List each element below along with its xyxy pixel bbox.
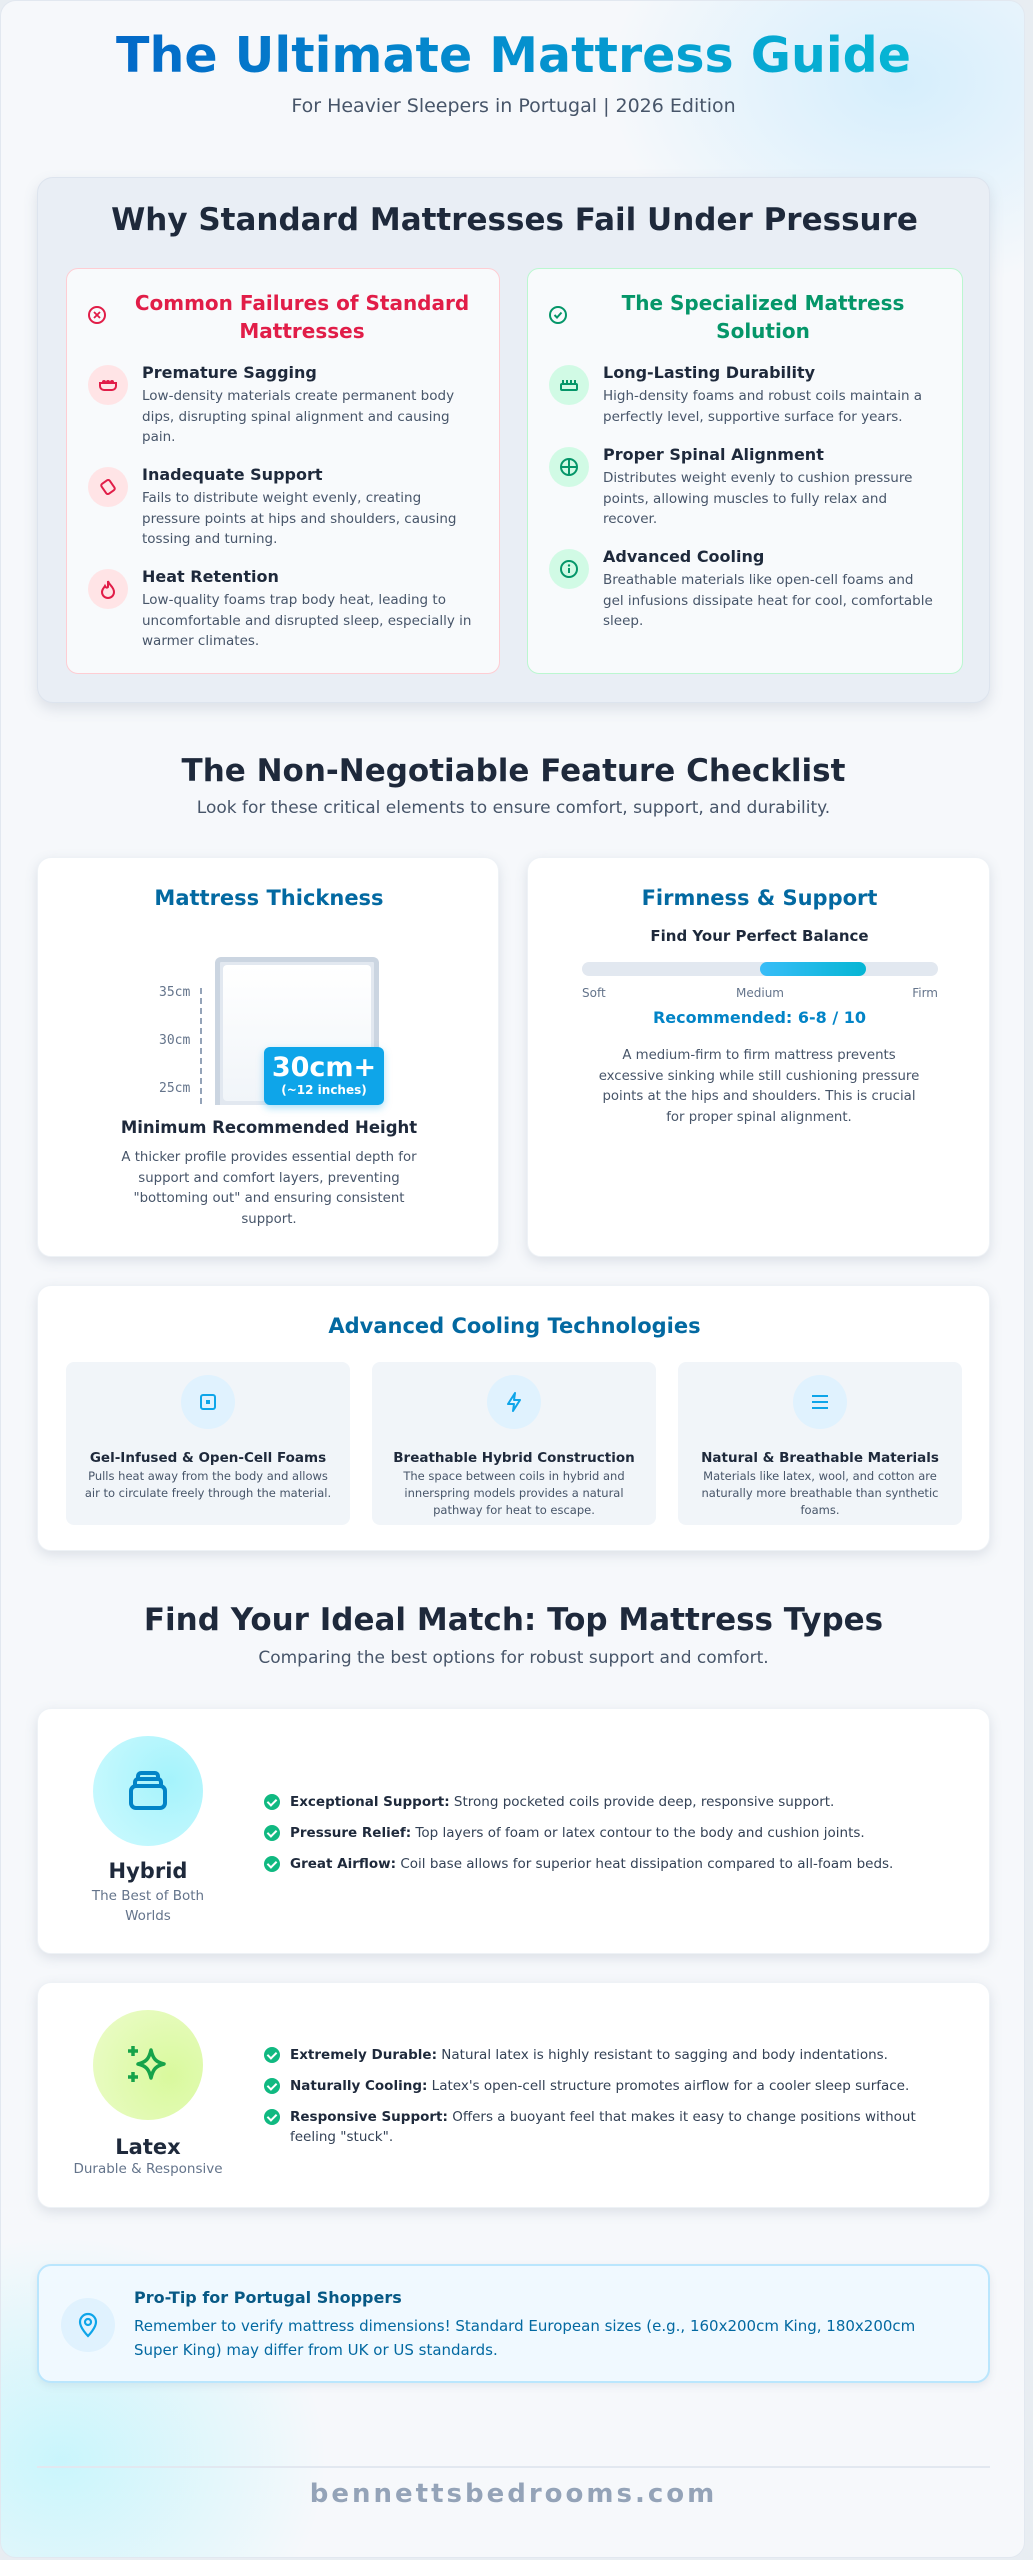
list: latex benefits: Responsive Support: Offers a buoyant feel that makes it easy to change positions without feeling "stuck". <box>290 2109 916 2145</box>
card: hybrid construction <box>372 1362 656 1525</box>
panel: common failures: Low-quality foams trap body heat, leading to uncomfortable and disrupted sleep, especially in warmer climates. <box>142 592 471 649</box>
panel: latex <box>37 1982 990 2208</box>
icon: gel <box>181 1375 235 1429</box>
title: The Ultimate Mattress Guide <box>116 27 911 84</box>
card: hybrid construction: Breathable Hybrid Construction <box>393 1450 635 1466</box>
label: hybrid sub: The Best of Both Worlds <box>92 1888 204 1924</box>
text: balance: Find Your Perfect Balance <box>650 927 869 945</box>
badge: 30cm+: (~12 inches) <box>281 1083 367 1097</box>
chart: firmness slider: Medium <box>736 986 784 1000</box>
badge: 30cm+: 30cm+ <box>272 1052 376 1083</box>
subheading: ideal match: Comparing the best options for robust support and comfort. <box>258 1648 769 1668</box>
item: spinal alignment <box>549 445 912 527</box>
list: latex benefits: Naturally Cooling: Latex's open-cell structure promotes airflow for a cooler sleep surface. <box>290 2078 909 2094</box>
text: pro tip title: Pro-Tip for Portugal Shoppers <box>134 2288 402 2307</box>
chart: thickness scale: 25cm <box>159 1081 190 1096</box>
icon: bolt <box>487 1375 541 1429</box>
heading: cooling: Advanced Cooling Technologies <box>328 1314 701 1338</box>
icon: lines <box>793 1375 847 1429</box>
subtitle: For Heavier Sleepers in Portugal | 2026 Edition <box>291 95 736 117</box>
text: thickness description: A thicker profile provides essential depth for support and comfort layers, preventing "bottoming out" and ensuring consistent support. <box>121 1150 417 1227</box>
heading: firmness: Firmness & Support <box>642 886 877 910</box>
heading: why standard: Why Standard Mattresses Fail Under Pressure <box>111 202 918 238</box>
callout: pro tip <box>37 2264 990 2383</box>
chart: firmness slider: Firm <box>912 986 938 1000</box>
list: hybrid benefits: Great Airflow: Coil base allows for superior heat dissipation compared to all-foam beds. <box>290 1856 893 1872</box>
panel: mattress thickness <box>37 857 499 1257</box>
card: natural materials: Natural & Breathable Materials <box>701 1450 939 1466</box>
panel: cooling technologies <box>37 1285 990 1551</box>
list: hybrid benefits: Exceptional Support: Strong pocketed coils provide deep, responsive support. <box>290 1794 834 1810</box>
label: latex: Latex <box>115 2135 181 2159</box>
card: natural materials: Materials like latex, wool, and cotton are naturally more breathable than synthetic foams. <box>702 1469 938 1517</box>
label: hybrid: Hybrid <box>109 1859 187 1883</box>
text: firmness description: A medium-firm to firm mattress prevents excessive sinking while still cushioning pressure points at the hips and shoulders. This is crucial for proper spinal alignment. <box>599 1048 919 1125</box>
chart: firmness slider: Soft <box>582 986 606 1000</box>
footer: website: bennettsbedrooms.com <box>310 2479 717 2509</box>
heading: checklist: The Non-Negotiable Feature Checklist <box>182 753 845 789</box>
panel: common failures: Low-density materials create permanent body dips, disrupting spinal alignment and causing pain. <box>142 388 454 445</box>
item: durability <box>549 363 922 424</box>
label: latex sub: Durable & Responsive <box>73 2161 223 2177</box>
panel: common failures: Fails to distribute weight evenly, creating pressure points at hips and shoulders, causing tossing and turning. <box>142 490 456 547</box>
panel: specialized solution: Advanced Cooling <box>603 547 764 566</box>
card: gel foams: Gel-Infused & Open-Cell Foams <box>90 1450 326 1466</box>
card: gel foams <box>66 1362 350 1525</box>
chart: thickness scale <box>159 957 389 1113</box>
heading: common failures: Common Failures of Standard Mattresses <box>135 291 469 343</box>
list: hybrid benefits: Pressure Relief: Top layers of foam or latex contour to the body and cushion joints. <box>290 1825 865 1841</box>
icon: x circle <box>88 306 106 324</box>
item: advanced cooling <box>549 547 933 629</box>
heading: ideal match: Find Your Ideal Match: Top Mattress Types <box>144 1602 883 1638</box>
panel: specialized solution: Proper Spinal Alignment <box>603 445 824 464</box>
list: hybrid benefits <box>264 1794 893 1872</box>
card: natural materials <box>678 1362 962 1525</box>
panel: specialized solution: Distributes weight evenly to cushion pressure points, allowing muscles to fully relax and recover. <box>603 470 912 527</box>
panel: hybrid <box>37 1708 990 1954</box>
card: gel foams: Pulls heat away from the body and allows air to circulate freely through the material. <box>85 1469 331 1500</box>
item: heat retention <box>88 567 471 649</box>
panel: common failures: Heat Retention <box>142 567 279 586</box>
card: hybrid construction: The space between coils in hybrid and innerspring models provides a natural pathway for heat to escape. <box>403 1469 625 1517</box>
text: recommended: Recommended: 6-8 / 10 <box>653 1008 866 1027</box>
panel: common failures: Premature Sagging <box>142 363 317 382</box>
badge: 30cm+ <box>264 1047 384 1105</box>
panel: why standard mattresses fail <box>37 177 990 703</box>
panel: specialized solution: Breathable materials like open-cell foams and gel infusions dissipate heat for cool, comfortable sleep. <box>603 572 933 629</box>
list: latex benefits: Extremely Durable: Natural latex is highly resistant to sagging and body indentations. <box>290 2047 888 2063</box>
panel: common failures: Inadequate Support <box>142 465 323 484</box>
icon: hybrid <box>93 1736 203 1846</box>
icon: map pin <box>61 2298 115 2352</box>
list: latex benefits <box>264 2047 916 2145</box>
chart: thickness scale: 30cm <box>159 1033 190 1048</box>
item: inadequate support <box>88 465 456 547</box>
heading: thickness: Mattress Thickness <box>154 886 384 910</box>
text: minimum height: Minimum Recommended Height <box>121 1118 417 1137</box>
panel: firmness <box>527 857 990 1257</box>
chart: firmness slider <box>582 962 938 1000</box>
subheading: checklist: Look for these critical elements to ensure comfort, support, and durability. <box>197 798 830 818</box>
icon: check circle <box>549 306 567 324</box>
panel: specialized solution: Long-Lasting Durability <box>603 363 815 382</box>
heading: specialized solution: The Specialized Mattress Solution <box>622 291 904 343</box>
item: premature sagging <box>88 363 454 445</box>
panel: specialized solution: High-density foams and robust coils maintain a perfectly level, supportive surface for years. <box>603 388 922 424</box>
panel: specialized solution <box>527 268 963 674</box>
panel: common failures <box>66 268 500 674</box>
chart: thickness scale: 35cm <box>159 985 190 1000</box>
icon: latex <box>93 2010 203 2120</box>
text: pro tip body: Remember to verify mattress dimensions! Standard European sizes (e.g., 160x200cm King, 180x200cm Super King) may differ from UK or US standards. <box>134 2317 915 2359</box>
